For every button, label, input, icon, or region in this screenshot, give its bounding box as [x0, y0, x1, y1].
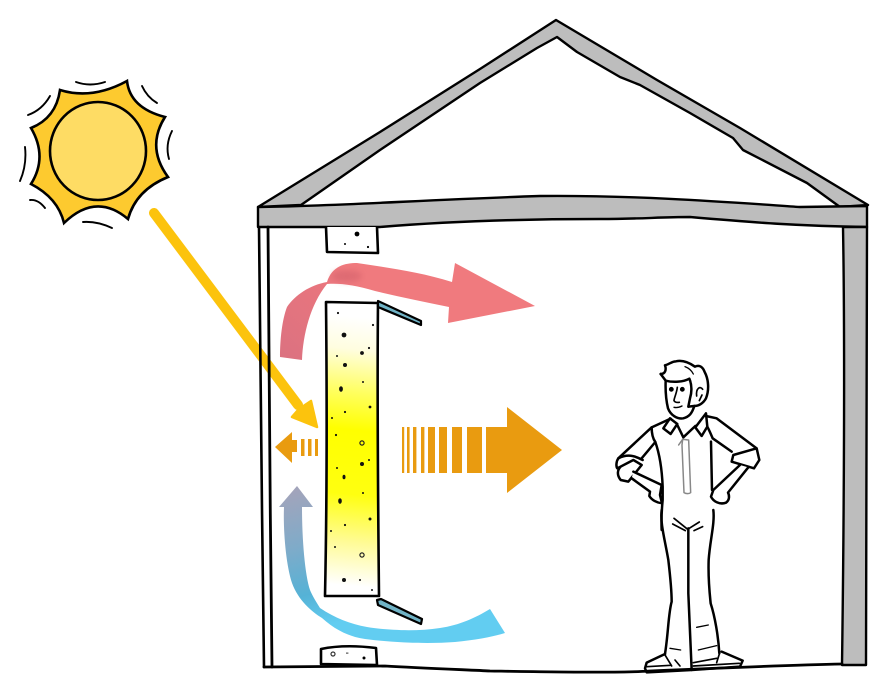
blue cool air arrow [279, 486, 505, 643]
roof [258, 20, 868, 207]
thermal mass wall [325, 302, 379, 596]
small orange heat loss arrow [275, 432, 318, 463]
person standing [616, 361, 759, 672]
person upper body [616, 361, 759, 530]
large orange radiant heat arrow [402, 407, 562, 493]
lower vent block [321, 646, 377, 665]
right wall [842, 227, 867, 665]
lower flap [377, 599, 422, 624]
left wall [259, 227, 272, 667]
red warm air arrow [280, 263, 535, 360]
floor [264, 664, 842, 672]
person legs and shoes [645, 510, 743, 672]
ceiling beam [258, 196, 867, 227]
upper flap [378, 301, 421, 325]
sun [20, 81, 172, 228]
sunlight ray arrow [154, 213, 317, 427]
upper vent block [326, 227, 378, 253]
